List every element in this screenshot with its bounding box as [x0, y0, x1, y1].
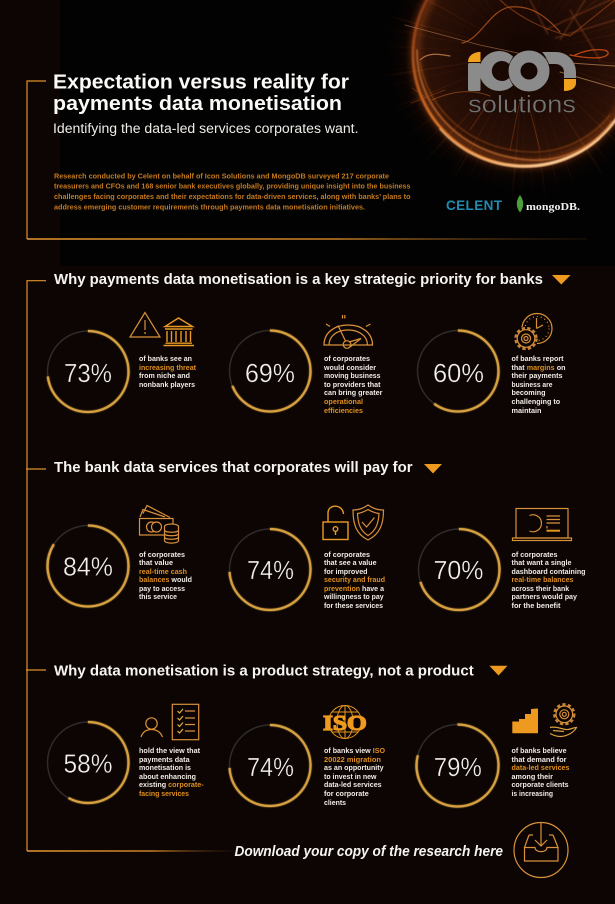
- icon: gauge: [324, 315, 372, 348]
- subtitle: Identifying the data-led services corporates want.: [53, 121, 358, 136]
- intro paragraph: Research conducted by Celent on behalf of Icon Solutions and MongoDB surveyed 217 corporate: [54, 171, 389, 180]
- panel: section 3: [48, 662, 576, 807]
- text: 74%: of corporates: [324, 550, 370, 559]
- text: 79%: corporate clients: [512, 780, 568, 789]
- text: 74%: data-led services: [324, 780, 382, 789]
- stat: 73%: [48, 331, 128, 412]
- logo: Celent: CELENT: [446, 198, 503, 213]
- stat: 58%: 58%: [64, 748, 112, 778]
- glowing orb artwork: [385, 0, 615, 194]
- text: 84%: [139, 550, 192, 601]
- icon: checklist: [172, 704, 199, 740]
- text: 73%: from niche and: [139, 371, 190, 380]
- title: payments data monetisation: [53, 92, 342, 115]
- stat: 74%: [230, 529, 310, 610]
- text: 58%: facing services: [139, 789, 189, 798]
- logo: MongoDB: [517, 195, 580, 213]
- text: 74%: clients: [324, 798, 346, 807]
- text: 74%: for corporate: [324, 789, 369, 798]
- panel: section 1: [48, 271, 571, 415]
- heading: Why data monetisation is a product strategy, not a product: [54, 662, 474, 679]
- text: 58%: monetisation is: [139, 763, 191, 772]
- text: 73%: of banks see an: [139, 354, 192, 363]
- text: 74%: for these services: [324, 601, 383, 610]
- text: 58%: hold the view that: [139, 746, 200, 755]
- icon: cash and coins: [140, 506, 178, 543]
- text: 74%: to invest in new: [324, 772, 377, 781]
- text: 60%: [512, 354, 566, 415]
- text: 58%: about enhancing: [139, 772, 196, 781]
- text: 74%: [324, 746, 385, 807]
- triangle marker: [552, 275, 571, 284]
- text: 60%: of banks report: [512, 354, 564, 363]
- intro paragraph: [54, 171, 411, 212]
- text: 79%: data-led services: [512, 763, 570, 772]
- stat: 70%: [418, 529, 500, 610]
- stat: 74%: [230, 725, 310, 806]
- icon: shield: [353, 505, 384, 540]
- icon: warning triangle: [130, 312, 160, 337]
- icon: ISO globe: [323, 706, 367, 738]
- text: 73%: [139, 354, 196, 389]
- icon: bank: [164, 318, 194, 346]
- stat: 74%: 74%: [247, 752, 294, 782]
- title: Expectation versus reality for: [53, 70, 349, 94]
- text: 79%: is increasing: [512, 789, 553, 798]
- icon: gear and hand: [550, 704, 576, 737]
- text: 60%: challenging to: [512, 397, 560, 406]
- intro paragraph: address emerging customer requirements through payments data monetisation initiatives.: [54, 203, 365, 212]
- text: 79%: among their: [512, 772, 553, 781]
- text: 74%: willingness to pay: [323, 592, 384, 601]
- stat: 79%: [416, 724, 498, 806]
- text: 69%: of corporates: [324, 354, 370, 363]
- text: 74%: of banks view ISO: [324, 746, 385, 755]
- text: 84%: balances would: [139, 575, 192, 584]
- stat: 60%: [418, 330, 498, 412]
- text: 79%: that demand for: [512, 755, 567, 764]
- stat: 84%: 84%: [63, 552, 113, 582]
- text: 84%: pay to access: [139, 584, 185, 593]
- text: 70%: for the benefit: [512, 601, 561, 610]
- text: 69%: moving business: [324, 371, 380, 380]
- text: 84%: this service: [139, 592, 177, 601]
- text: 60%: that margins on: [512, 363, 566, 372]
- stat: 58%: [48, 722, 128, 803]
- stat: 84%: [48, 526, 128, 606]
- text: 60%: their payments: [512, 371, 562, 380]
- text: 69%: efficiencies: [324, 406, 363, 415]
- text: 58%: existing corporate-: [139, 780, 204, 789]
- heading: Why payments data monetisation is a key strategic priority for banks: [54, 271, 543, 288]
- stat: 70%: 70%: [434, 555, 484, 585]
- icon: clock and gear: [514, 314, 552, 350]
- text: 58%: payments data: [139, 755, 190, 764]
- text: 69%: [323, 354, 382, 415]
- text: 79%: of banks believe: [512, 746, 566, 755]
- stat: 79%: 79%: [434, 752, 482, 782]
- icon: person: [141, 718, 162, 737]
- intro paragraph: challenges facing corporates and their expectations for data-driven services, along with banks’ plans to: [54, 192, 411, 201]
- text: 70%: of corporates: [512, 550, 558, 559]
- icon: laptop dashboard: [512, 508, 572, 540]
- logo: Icon Solutions: [468, 51, 576, 118]
- triangle marker: [489, 666, 508, 676]
- text: 84%: of corporates: [139, 550, 185, 559]
- text: 74%: [323, 550, 385, 610]
- stat: 73%: 73%: [64, 358, 112, 388]
- icon: ISO globe: ISO: [323, 711, 367, 735]
- text: 74%: as an opportunity: [324, 763, 384, 772]
- stat: 69%: [230, 330, 310, 412]
- text: 70%: partners would pay: [512, 592, 578, 601]
- text: 74%: security and fraud: [324, 575, 385, 584]
- text: 69%: would consider: [323, 363, 376, 372]
- text: 74%: prevention have a: [324, 584, 385, 593]
- panel: header: [53, 0, 615, 266]
- logo: MongoDB: mongoDB.: [526, 202, 580, 213]
- call to action: download: [234, 822, 568, 878]
- text: 79%: [512, 746, 570, 798]
- text: 70%: [512, 550, 586, 610]
- text: 60%: becoming: [512, 388, 546, 397]
- text: 74%: 20022 migration: [324, 755, 381, 764]
- text: 58%: [139, 746, 204, 798]
- text: 70%: across their bank: [512, 584, 570, 593]
- panel: section 2: [48, 459, 586, 610]
- text: 74%: for improved: [324, 567, 368, 576]
- icon: rising steps: [512, 708, 538, 733]
- text: 69%: to providers that: [324, 380, 381, 389]
- text: 84%: real-time cash: [139, 567, 187, 576]
- stat: 60%: 60%: [433, 358, 484, 388]
- stat: 69%: 69%: [245, 358, 295, 388]
- text: 69%: operational: [324, 397, 363, 406]
- logo: Icon Solutions: solutions: [468, 92, 576, 118]
- intro paragraph: treasurers and CFOs and 168 senior bank executives globally, providing unique insight into the business: [54, 182, 410, 191]
- call to action: download: Download your copy of the research here: [234, 844, 503, 860]
- text: 73%: nonbank players: [139, 380, 195, 389]
- icon: open padlock: [323, 506, 348, 540]
- text: 84%: that value: [139, 558, 173, 567]
- text: 69%: can bring greater: [324, 388, 382, 397]
- text: 70%: real-time balances: [512, 575, 574, 584]
- icon: download tray: [514, 822, 568, 878]
- text: 70%: dashboard containing: [512, 567, 586, 576]
- stat: 74%: 74%: [247, 555, 294, 585]
- text: 73%: increasing threat: [139, 363, 196, 372]
- text: 74%: that see a value: [324, 558, 376, 567]
- text: 60%: maintain: [512, 406, 542, 415]
- heading: The bank data services that corporates will pay for: [54, 459, 413, 476]
- text: 60%: business are: [512, 380, 552, 389]
- triangle marker: [424, 464, 442, 474]
- text: 70%: that want a single: [512, 558, 572, 567]
- connector bracket: [26, 81, 587, 851]
